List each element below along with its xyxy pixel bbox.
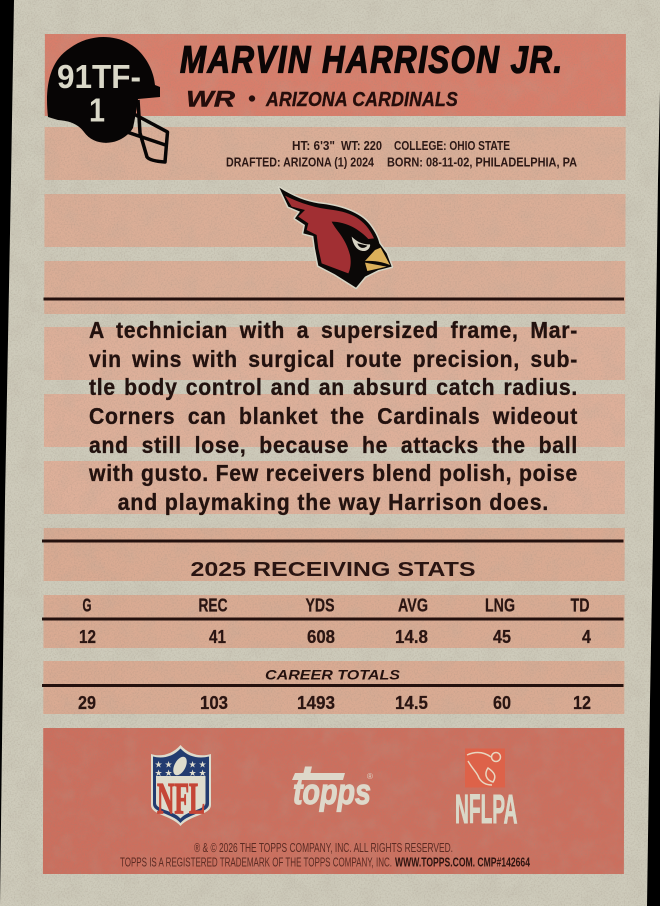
- season values: 4: [582, 627, 591, 647]
- text band 3: [44, 461, 625, 514]
- player facts: BORN: 08-11-02, PHILADELPHIA, PA: [387, 154, 578, 170]
- season values: 12: [79, 627, 96, 647]
- topps logo: topps: [293, 771, 371, 812]
- logo band upper: [44, 194, 626, 247]
- icon: NFL shield: ★: [154, 768, 163, 778]
- text band 2: [44, 394, 625, 447]
- legal text: ® & © 2026 THE TOPPS COMPANY, INC. ALL RIGHTS RESERVED.: [194, 841, 453, 855]
- text: NFLPA: [455, 786, 518, 832]
- bio facts band: [45, 127, 626, 180]
- player biography text: and still lose, because he attacks the ball: [89, 432, 578, 458]
- position and team: ARIZONA CARDINALS: [265, 89, 458, 111]
- icon: NFL shield: ★: [198, 768, 207, 778]
- icon: NFL shield: ★: [164, 768, 173, 778]
- season stats table: [79, 596, 591, 647]
- position and team: [186, 86, 458, 112]
- logo band lower: [44, 261, 625, 314]
- season values: 41: [209, 627, 226, 647]
- icon: NFL shield: ★: [198, 760, 207, 770]
- career stats values: 29: [78, 693, 96, 713]
- player biography text: with gusto. Few receivers blend polish, poise: [89, 460, 578, 486]
- legal text: TOPPS IS A REGISTERED TRADEMARK OF THE TOPPS COMPANY, INC.: [120, 856, 392, 870]
- season stats band: [43, 595, 625, 648]
- icon: NFL shield: ★: [154, 760, 163, 770]
- rule lines: [42, 298, 624, 687]
- footer band: [43, 728, 624, 874]
- icon: football helmet: [47, 37, 168, 162]
- card number: 91TF-: [57, 58, 141, 95]
- legal text: WWW.TOPPS.COM. CMP#142664: [395, 856, 530, 870]
- player facts: DRAFTED: ARIZONA (1) 2024: [226, 154, 375, 170]
- topps logo: ®: [367, 772, 373, 781]
- player name: MARVIN HARRISON JR.: [180, 40, 562, 81]
- career stats band: [43, 661, 624, 714]
- position and team: WR: [186, 86, 235, 112]
- card number: 1: [89, 92, 105, 128]
- icon: NFL shield: ★: [164, 760, 173, 770]
- column headers: G: [82, 596, 92, 616]
- icon: cardinals logo: [279, 188, 392, 288]
- stats title band: [44, 528, 625, 581]
- career stats values: 12: [573, 693, 591, 713]
- season values: [79, 627, 591, 647]
- column headers: REC: [198, 596, 228, 616]
- season values: 14.8: [395, 627, 428, 647]
- player biography text: and playmaking the way Harrison does.: [118, 489, 549, 515]
- career stats values: [78, 693, 591, 713]
- legal text: [120, 841, 530, 870]
- career totals heading: CAREER TOTALS: [265, 668, 400, 682]
- icon: NFL shield: [151, 745, 211, 826]
- player biography text: [88, 317, 578, 516]
- season values: 45: [493, 627, 511, 647]
- header band: [45, 34, 626, 116]
- text band 1: [44, 327, 625, 380]
- icon: NFL shield: ★: [188, 768, 197, 778]
- career stats values: 1493: [297, 693, 335, 713]
- player facts: COLLEGE: OHIO STATE: [394, 138, 510, 153]
- column headers: YDS: [306, 596, 334, 616]
- player facts: WT: 220: [341, 138, 382, 153]
- player biography text: tle body control and an absurd catch radius.: [89, 374, 578, 400]
- stats heading: 2025 RECEIVING STATS: [190, 559, 476, 581]
- career stats values: 14.5: [395, 693, 428, 713]
- career stats values: 60: [493, 693, 511, 713]
- column headers: LNG: [485, 596, 515, 616]
- NFLPA logo: [455, 748, 518, 832]
- icon: NFL shield: ★: [188, 760, 197, 770]
- card number: [57, 58, 141, 128]
- column headers: AVG: [398, 596, 428, 616]
- column headers: TD: [570, 596, 590, 616]
- column headers: [82, 596, 590, 616]
- player biography text: vin wins with surgical route precision, sub-: [89, 346, 578, 372]
- icon: NFL shield: NFL: [157, 774, 205, 823]
- player biography text: A technician with a supersized frame, Mar-: [89, 317, 578, 343]
- career stats values: 103: [200, 693, 228, 713]
- player facts: [226, 138, 578, 170]
- player facts: HT: 6'3": [292, 138, 335, 153]
- player biography text: Corners can blanket the Cardinals wideout: [89, 403, 578, 429]
- season values: 608: [307, 627, 335, 647]
